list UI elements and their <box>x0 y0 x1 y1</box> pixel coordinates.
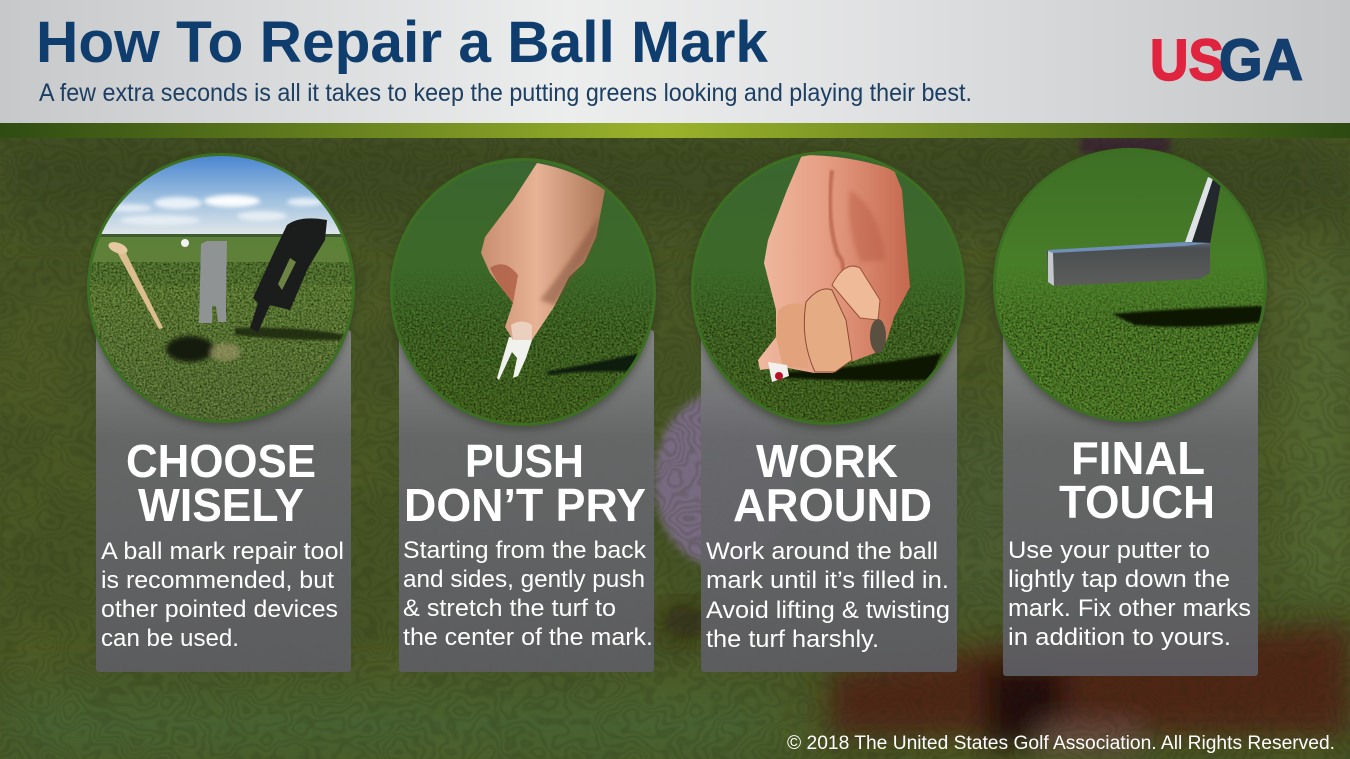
body text: Use your putter to <box>1008 537 1210 564</box>
body text <box>706 538 950 653</box>
photo circle 4: putter tapping down mark <box>992 147 1268 426</box>
heading: PUSH <box>465 435 584 487</box>
copyright: © 2018 The United States Golf Association. All Rights Reserved. <box>787 733 1335 754</box>
USGA logo: US <box>1150 28 1224 93</box>
body text: Starting from the back <box>403 537 647 564</box>
heading: DON’T PRY <box>404 479 646 531</box>
heading <box>126 435 316 531</box>
panel: final touch card <box>1003 330 1258 676</box>
heading <box>404 435 646 531</box>
green gradient bar <box>0 123 1350 138</box>
subtitle: A few extra seconds is all it takes to keep the putting greens looking and playing their best. <box>39 79 972 107</box>
heading: AROUND <box>733 479 932 531</box>
body text: is recommended, but <box>101 567 334 594</box>
body text: Avoid lifting & twisting <box>706 597 950 624</box>
body text: lightly tap down the <box>1008 566 1230 593</box>
heading: TOUCH <box>1059 476 1215 528</box>
USGA logo: GA <box>1219 28 1303 93</box>
body text: can be used. <box>101 625 239 652</box>
title: How To Repair a Ball Mark <box>36 10 769 75</box>
body text: the center of the mark. <box>403 624 653 651</box>
header band <box>0 0 1350 123</box>
heading: CHOOSE <box>126 435 316 487</box>
heading: WORK <box>756 435 898 487</box>
body text <box>403 537 653 651</box>
USGA logo <box>1150 28 1303 93</box>
body text: and sides, gently push <box>403 566 645 593</box>
body text <box>101 538 344 652</box>
photo circle 3: fist working tool around mark <box>690 150 966 429</box>
heading <box>733 435 932 531</box>
body text: mark. Fix other marks <box>1008 595 1251 622</box>
panel: push don't pry card <box>399 330 654 672</box>
body text: the turf harshly. <box>706 626 879 653</box>
body text: in addition to yours. <box>1008 624 1231 651</box>
heading: FINAL <box>1071 432 1205 484</box>
photo circle 2: hand pushing repair tool <box>389 158 657 430</box>
body text: other pointed devices <box>101 596 338 623</box>
heading <box>1059 432 1215 528</box>
panel: work around card <box>701 330 957 672</box>
heading: WISELY <box>138 479 304 531</box>
body text: Work around the ball <box>706 538 938 565</box>
body text: & stretch the turf to <box>403 595 616 622</box>
body text <box>1008 537 1251 651</box>
body text: A ball mark repair tool <box>101 538 344 565</box>
photo circle 1: tee, repair tools and ball mark <box>86 152 356 427</box>
body text: mark until it’s filled in. <box>706 567 949 594</box>
panel: choose wisely card <box>96 330 351 672</box>
